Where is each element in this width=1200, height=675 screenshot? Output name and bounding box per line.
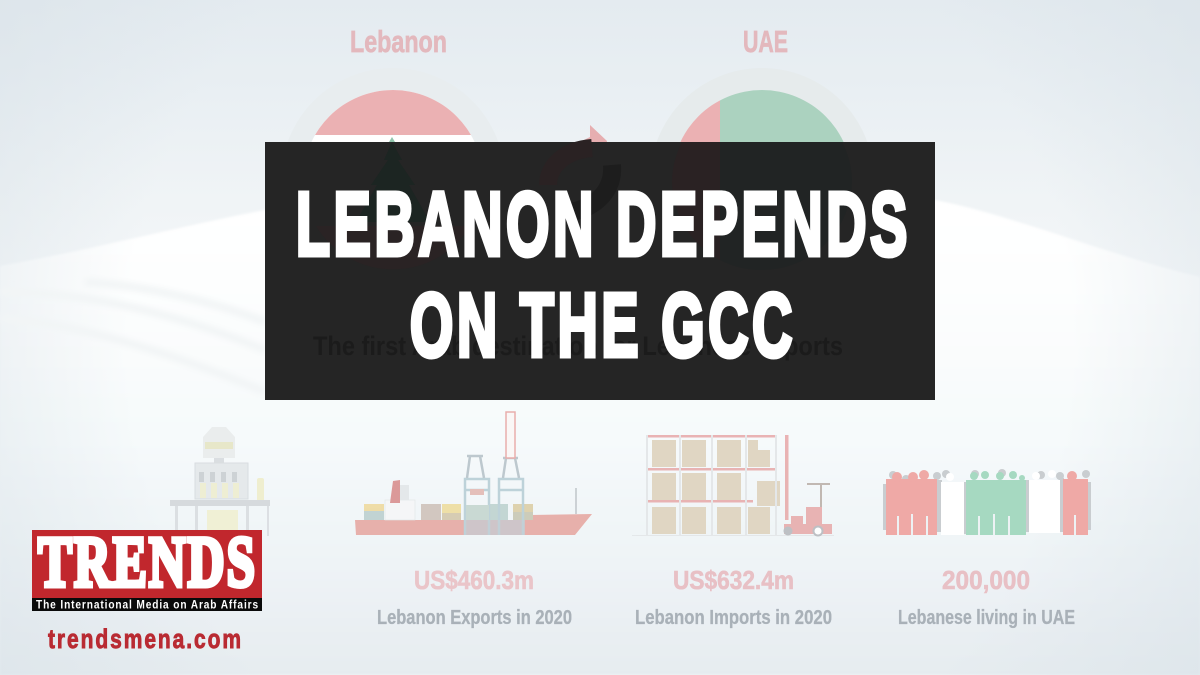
banner title text — [296, 175, 911, 376]
stat: exports — [377, 565, 572, 629]
arrow between flags — [572, 125, 607, 146]
icon: crowd of people in UAE flag colours — [883, 469, 1091, 535]
stat: exports: US$460.3m — [414, 565, 534, 595]
ghost subtitle under banner: The first Arab destination for Lebanese exports — [313, 331, 843, 361]
stat: Lebanese in UAE — [898, 565, 1075, 629]
stat: imports: US$632.4m — [673, 565, 794, 595]
icon: container ship and cranes — [355, 412, 592, 535]
ghost of UAE circle under banner — [672, 142, 852, 270]
logo: TRENDS: The International Media on Arab Affairs — [36, 600, 259, 612]
country label: Lebanon: Lebanon — [350, 24, 447, 59]
icon: bottling machine — [170, 427, 270, 536]
banner title text: ON THE GCC — [410, 276, 796, 376]
title banner — [265, 142, 935, 400]
stat: Lebanese in UAE: 200,000 — [942, 565, 1030, 595]
stat: imports — [635, 565, 832, 629]
stat: Lebanese in UAE: Lebanese living in UAE — [898, 607, 1075, 629]
Lebanon flag circle — [312, 90, 474, 142]
website url: trendsmena.com — [48, 624, 243, 654]
stat: exports: Lebanon Exports in 2020 — [377, 607, 572, 629]
ghost of exchange arrows under banner — [548, 148, 612, 212]
UAE flag circle — [658, 90, 867, 142]
logo: TRENDS: TRENDS — [38, 522, 257, 602]
ghost of Lebanon circle under banner — [316, 142, 470, 269]
country label: UAE: UAE — [743, 24, 788, 59]
logo: TRENDS — [32, 522, 262, 612]
icon: warehouse and forklift — [632, 435, 834, 536]
stat: imports: Lebanon Imports in 2020 — [635, 607, 832, 629]
